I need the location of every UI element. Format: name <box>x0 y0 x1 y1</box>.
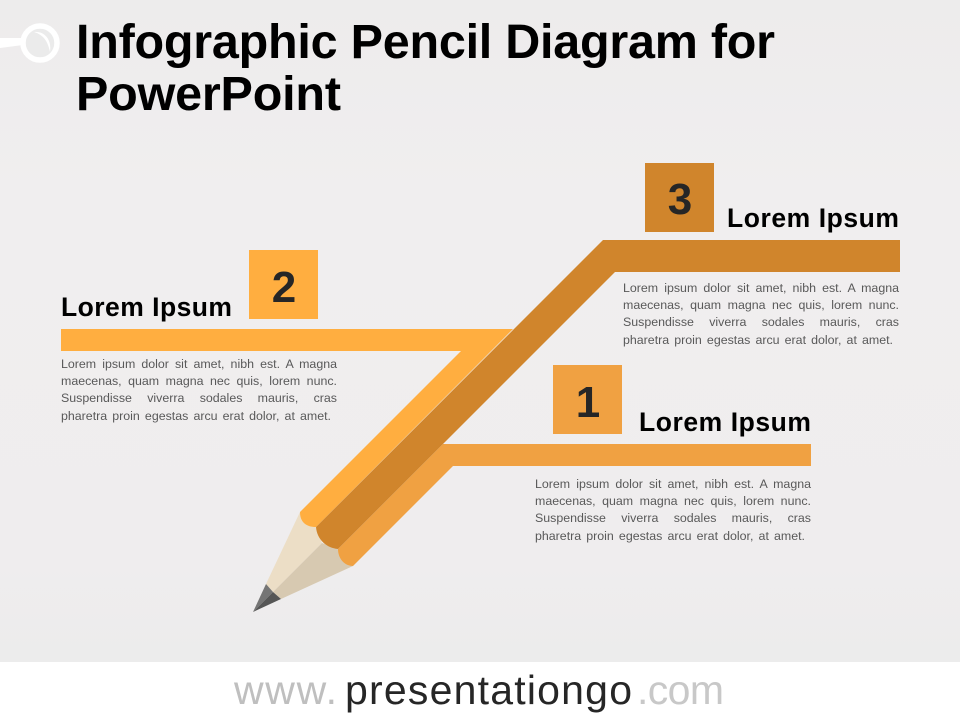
footer website address: www. <box>233 667 337 713</box>
heading 2: Lorem Ipsum <box>61 292 232 322</box>
text block 2: Suspendisse viverra sodales mauris, cras <box>61 391 337 405</box>
heading 1: Lorem Ipsum <box>639 407 811 437</box>
title: PowerPoint <box>76 67 341 121</box>
number box 3: 3 <box>668 175 692 224</box>
band 3: dark orange stripe <box>316 240 900 549</box>
text block 1: Lorem ipsum dolor sit amet, nibh est. A magna <box>535 477 811 491</box>
text block 2 <box>61 357 337 423</box>
text block 3: Suspendisse viverra sodales mauris, cras <box>623 315 899 329</box>
pencil illustration <box>61 240 900 612</box>
text block 2: Lorem ipsum dolor sit amet, nibh est. A magna <box>61 357 337 371</box>
text block 1: maecenas, quam magna nec quis, lorem nunc. <box>535 494 811 508</box>
text block 2: pharetra proin egestas arcu erat dolor, at amet. <box>61 409 331 423</box>
text block 3: pharetra proin egestas arcu erat dolor, at amet. <box>623 333 893 347</box>
text block 3 <box>623 281 899 347</box>
band 2: light orange stripe <box>61 329 513 527</box>
title <box>76 15 775 121</box>
pencil wood tip light side <box>266 512 322 592</box>
number box 1 <box>553 365 622 434</box>
text block 3: maecenas, quam magna nec quis, lorem nunc. <box>623 298 899 312</box>
number box 1: 1 <box>576 378 600 427</box>
band 1: medium orange stripe <box>338 444 811 566</box>
text block 1: Suspendisse viverra sodales mauris, cras <box>535 511 811 525</box>
heading 3: Lorem Ipsum <box>727 203 899 233</box>
text block 1: pharetra proin egestas arcu erat dolor, at amet. <box>535 529 805 543</box>
footer website address <box>233 667 724 713</box>
number box 2: 2 <box>272 263 296 312</box>
title: Infographic Pencil Diagram for <box>76 15 775 69</box>
footer website address: presentationgo <box>345 667 632 713</box>
text block 3: Lorem ipsum dolor sit amet, nibh est. A magna <box>623 281 899 295</box>
number box 3 <box>645 163 714 232</box>
footer website address: .com <box>637 667 724 713</box>
icon: white pin circle <box>0 26 57 60</box>
text block 1 <box>535 477 811 543</box>
number box 2 <box>249 250 318 319</box>
pencil wood tip shaded side <box>273 543 353 599</box>
text block 2: maecenas, quam magna nec quis, lorem nunc. <box>61 374 337 388</box>
pencil graphite point <box>253 584 281 612</box>
